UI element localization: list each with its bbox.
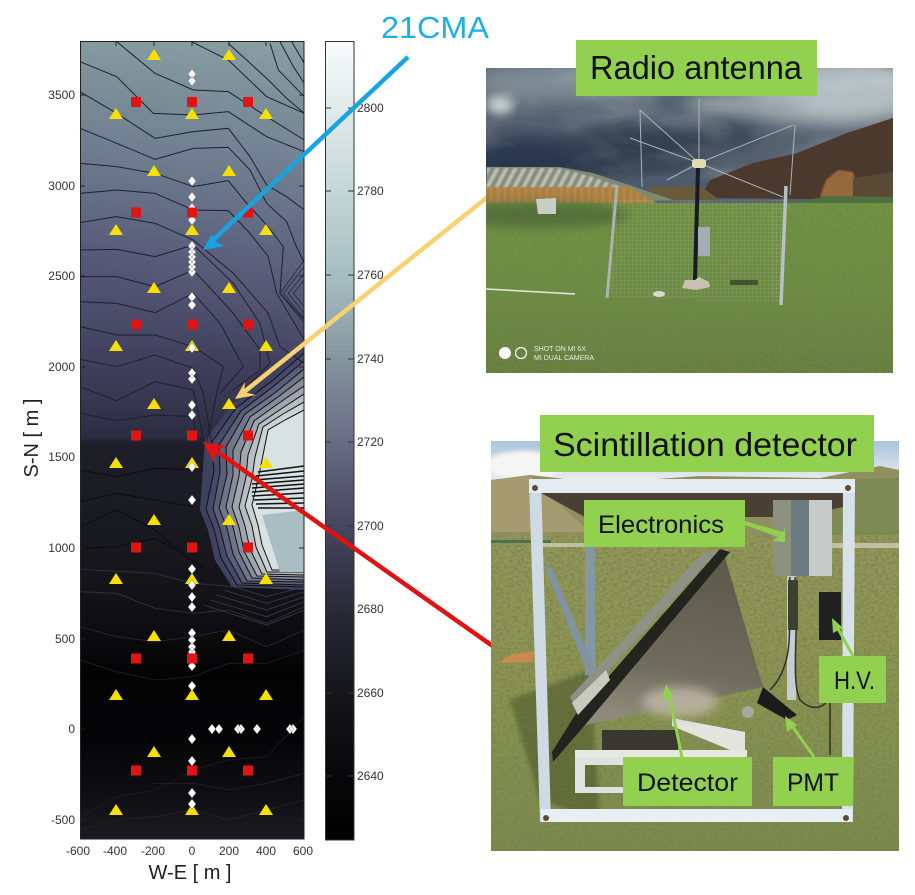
label box: H.V.: H.V. xyxy=(834,667,875,695)
y axis tick labels: 0 xyxy=(68,722,75,736)
y axis tick labels: 1500 xyxy=(48,450,75,464)
y axis tick labels xyxy=(48,88,75,827)
arrow: scintillation detector pointer (red) xyxy=(203,442,494,647)
y axis tick labels: 500 xyxy=(55,632,75,646)
colorbar tick labels xyxy=(357,101,384,783)
colorbar tick labels: 2720 xyxy=(357,435,384,449)
y axis tick labels: 3500 xyxy=(48,88,75,102)
orange lichen rock xyxy=(498,651,534,663)
electronics box xyxy=(698,227,710,256)
sky xyxy=(486,68,893,203)
grass xyxy=(486,203,893,373)
antenna wires xyxy=(630,98,795,197)
arrow: 21CMA pointer (blue) xyxy=(203,57,408,250)
camera watermark xyxy=(499,346,594,360)
hills xyxy=(491,466,899,535)
x axis tick labels: 600 xyxy=(293,844,313,858)
x axis tick labels xyxy=(66,844,313,858)
green pointer: detector xyxy=(662,684,682,757)
y axis tick labels: 3000 xyxy=(48,179,75,193)
colorbar tick labels: 2740 xyxy=(357,352,384,366)
colorbar tick labels: 2700 xyxy=(357,519,384,533)
y axis tick labels: 2000 xyxy=(48,360,75,374)
white instrument hut xyxy=(536,198,556,214)
x axis tick labels: -200 xyxy=(141,844,165,858)
colorbar tick labels: 2640 xyxy=(357,769,384,783)
brown foothill xyxy=(650,186,720,200)
antenna mast xyxy=(695,168,698,280)
electronics enclosure xyxy=(773,500,791,576)
label: 21CMA: 21CMA xyxy=(381,10,489,45)
heading box: Scintillation detector: Scintillation detector xyxy=(553,426,857,463)
y axis tick labels: 2500 xyxy=(48,269,75,283)
photo: radio antenna in the field xyxy=(486,68,893,373)
detector horn xyxy=(585,551,763,725)
label box: Electronics: Electronics xyxy=(598,511,724,539)
y axis title: S-N [ m ] xyxy=(21,399,43,477)
camera watermark: MI DUAL CAMERA xyxy=(534,355,594,362)
heading box: Radio antenna: Radio antenna xyxy=(590,49,803,86)
colorbar tick labels: 2760 xyxy=(357,268,384,282)
map background: elevation shading xyxy=(80,41,304,839)
colorbar: elevation scale xyxy=(325,42,384,840)
heading box: Radio antenna xyxy=(576,40,817,96)
colorbar tick labels: 2800 xyxy=(357,101,384,115)
map frame and ticks xyxy=(80,41,304,839)
arrow: radio antenna pointer (yellow) xyxy=(235,195,490,399)
label box: Electronics xyxy=(584,500,745,547)
panel: elevation contour map xyxy=(21,41,313,884)
distant blue hills xyxy=(642,176,708,189)
fence posts xyxy=(607,185,617,298)
x axis title: W-E [ m ] xyxy=(149,862,231,884)
green pointer: electronics xyxy=(745,521,785,542)
detector dark lid xyxy=(552,549,730,762)
label box: PMT xyxy=(773,757,853,806)
H.V. box xyxy=(819,592,841,640)
meadow xyxy=(491,535,899,851)
scintillator stations: yellow triangles xyxy=(109,49,273,815)
x axis tick labels: -400 xyxy=(103,844,127,858)
label box: H.V. xyxy=(819,656,886,703)
stone line at the horizon xyxy=(491,540,551,543)
far antenna field xyxy=(486,167,673,205)
radio stations: red squares xyxy=(131,97,253,776)
frame bolts xyxy=(532,485,851,821)
label box: Detector: Detector xyxy=(637,769,738,797)
colorbar tick labels: 2680 xyxy=(357,602,384,616)
sky xyxy=(491,441,899,480)
y axis tick labels: 1000 xyxy=(48,541,75,555)
x axis tick labels: -600 xyxy=(66,844,90,858)
map contour lines, southern half xyxy=(80,468,304,830)
colorbar tick labels: 2780 xyxy=(357,184,384,198)
photo: scintillation detector xyxy=(485,441,899,851)
y axis tick labels: -500 xyxy=(51,813,75,827)
PMT xyxy=(757,687,797,720)
green pointer: H.V. xyxy=(832,618,853,656)
x axis tick labels: 400 xyxy=(256,844,276,858)
base frame xyxy=(575,718,747,793)
mountain on the right xyxy=(700,118,893,200)
21CMA pods: white diamonds xyxy=(188,69,297,809)
map contour lines, northern half xyxy=(80,42,304,450)
x axis tick labels: 0 xyxy=(189,844,196,858)
steel frame xyxy=(529,480,551,822)
roof underside xyxy=(541,493,845,517)
antenna hub xyxy=(692,159,706,168)
x axis tick labels: 200 xyxy=(219,844,239,858)
cables xyxy=(770,577,832,755)
colorbar tick labels: 2660 xyxy=(357,686,384,700)
label box: Detector xyxy=(623,757,752,806)
ground shadow xyxy=(510,670,600,820)
camera watermark: SHOT ON MI 6X xyxy=(534,346,586,353)
back post and strut xyxy=(585,547,595,675)
rocks at mast foot xyxy=(682,277,710,290)
wire mesh fence xyxy=(607,200,784,302)
green pointer: PMT xyxy=(785,716,814,757)
label box: PMT: PMT xyxy=(787,769,839,797)
heading box: Scintillation detector xyxy=(540,415,874,472)
